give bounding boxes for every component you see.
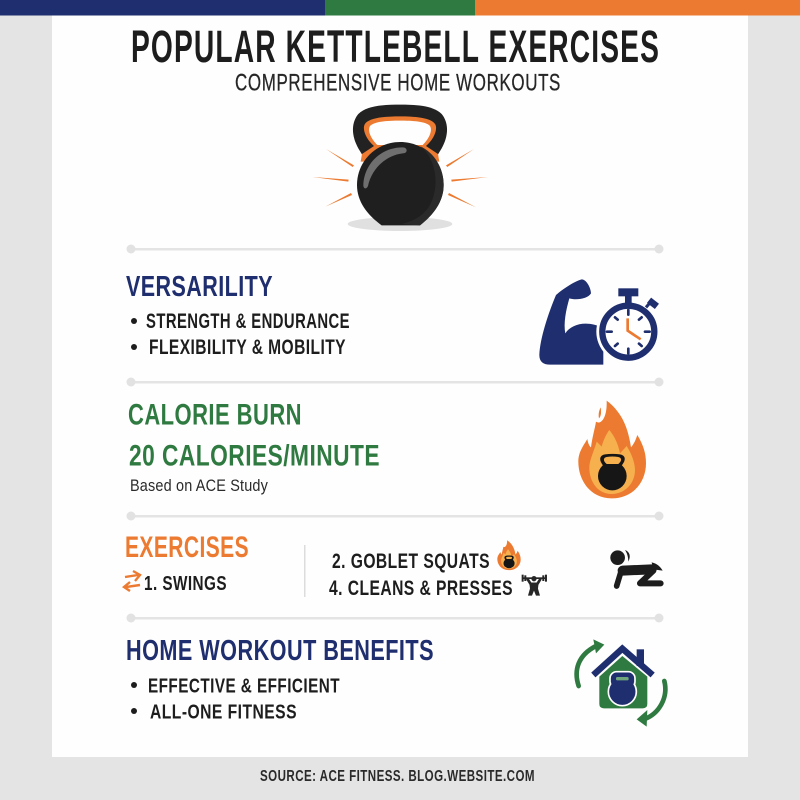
stat: 20 calories per minute: 20 CALORIES/MINUTE (129, 440, 380, 472)
divider 3 (126, 512, 664, 520)
heading: exercises: EXERCISES (125, 531, 249, 564)
exercise 4: cleans and presses: 4. CLEANS & PRESSES (329, 576, 513, 600)
note: based on ACE study: Based on ACE Study (130, 476, 268, 495)
section: versatility (126, 271, 660, 365)
divider 4 (126, 614, 664, 622)
bullet list: benefits: EFFECTIVE & EFFICIENT (148, 674, 340, 698)
bullet list: versatility: STRENGTH & ENDURANCE (146, 310, 350, 333)
top colour bar (0, 0, 800, 16)
bullet list: versatility: FLEXIBILITY & MOBILITY (149, 336, 346, 359)
section: calorie burn (128, 398, 646, 498)
heading: home workout benefits: HOME WORKOUT BENEFITS (126, 635, 434, 667)
bullet list: benefits: ALL-ONE FITNESS (150, 700, 297, 724)
bullet list: versatility (131, 310, 350, 359)
bullet list: benefits (131, 674, 340, 724)
section: home workout benefits (126, 635, 665, 727)
icon: kettlebell with burst lines (312, 105, 488, 231)
icon: small flame kettlebell (497, 540, 521, 570)
divider 2 (126, 378, 664, 386)
exercise 2: goblet squats: 2. GOBLET SQUATS (332, 549, 490, 573)
source footer: SOURCE: ACE FITNESS. BLOG.WEBSITE.COM (260, 768, 535, 785)
icon: house with kettlebell and cycle arrows (577, 639, 665, 727)
section: exercises (124, 531, 663, 600)
divider 1 (126, 244, 664, 254)
icon: swap arrows (124, 571, 140, 591)
column divider (304, 545, 306, 597)
icon: flame with kettlebell (578, 401, 646, 498)
heading: calorie burn: CALORIE BURN (128, 398, 302, 432)
subtitle: COMPREHENSIVE HOME WORKOUTS (235, 70, 561, 96)
icon: weightlifter (522, 575, 547, 596)
exercise 1: swings: 1. SWINGS (144, 572, 227, 595)
icon: crawling figure (610, 550, 663, 586)
heading: versarility: VERSARILITY (126, 271, 273, 303)
icon: flexed arm and stopwatch (539, 279, 660, 365)
